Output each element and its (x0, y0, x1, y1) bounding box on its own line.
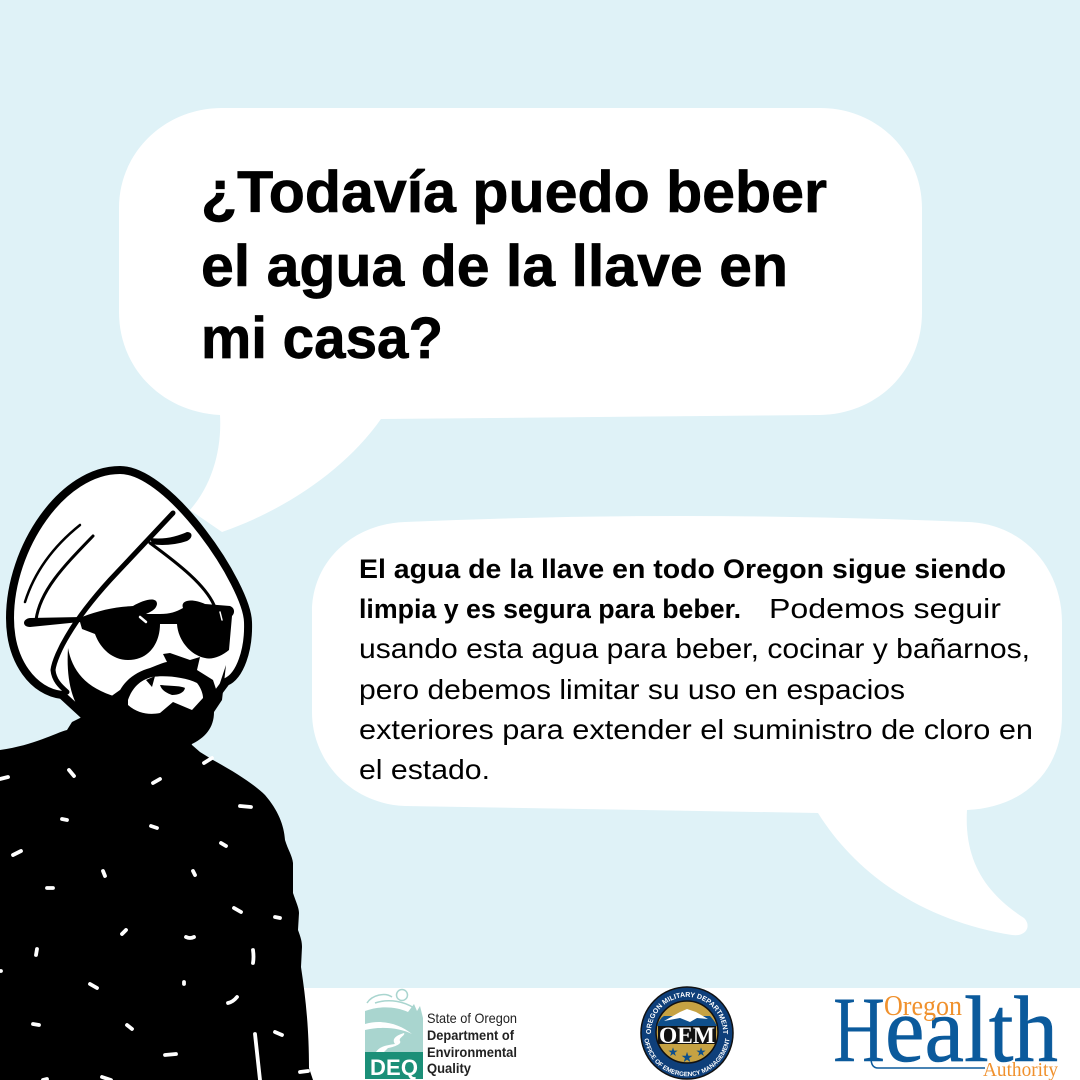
logo: OEM seal (640, 986, 734, 1080)
beard (68, 648, 226, 745)
answer text: limpia y es segura para beber. (359, 594, 741, 624)
answer text: usando esta agua para beber, cocinar y bañarnos, (359, 633, 1030, 664)
sunglasses (24, 600, 234, 660)
lens highlights (140, 612, 222, 622)
seal foreground (657, 1016, 717, 1026)
answer text: Podemos seguir (769, 593, 1001, 624)
Health wordmark: ealth (885, 978, 1058, 1080)
title: el agua de la llave en (201, 234, 788, 299)
logo: OEM seal: OREGON MILITARY DEPARTMENT (646, 992, 728, 1034)
answer text: pero debemos limitar su uso en espacios (359, 674, 905, 705)
seal stars: ★ (696, 1045, 706, 1059)
DEQ landscape (365, 990, 423, 1052)
DEQ name: Department of (427, 1027, 514, 1043)
seal mountain (664, 1009, 708, 1022)
mustache detail (146, 676, 155, 687)
logo: Oregon DEQ (365, 990, 517, 1080)
turban folds (25, 513, 214, 692)
logo: Oregon Health Authority (833, 978, 1058, 1080)
beard white around mouth (128, 676, 203, 714)
seal stars (668, 1045, 706, 1065)
seal stars: ★ (668, 1045, 678, 1059)
Health wordmark: H (833, 978, 885, 1080)
answer text (359, 554, 1033, 785)
seal wordmark: OEM (659, 1023, 715, 1048)
man illustration (0, 470, 313, 1080)
mouth (160, 685, 185, 695)
DEQ name: Quality (427, 1060, 471, 1076)
turban (10, 470, 248, 730)
DEQ name: State of Oregon (427, 1010, 517, 1026)
logo: OEM seal: OFFICE OF EMERGENCY MANAGEMENT (644, 1038, 730, 1076)
seal stars: ★ (681, 1049, 693, 1065)
answer text: exteriores para extender el suministro de cloro en (359, 714, 1033, 745)
DEQ name: Environmental (427, 1044, 517, 1060)
answer text: el estado. (359, 754, 490, 785)
question speech bubble (119, 108, 922, 532)
underline (871, 1058, 985, 1068)
DEQ name (427, 1010, 517, 1076)
turban knot end (150, 532, 192, 545)
DEQ badge (365, 1052, 423, 1079)
logo: Oregon DEQ: DEQ (370, 1055, 418, 1080)
answer text: El agua de la llave en todo Oregon sigue siendo (359, 554, 1006, 584)
title: mi casa? (201, 306, 443, 371)
body and sweater (0, 690, 313, 1080)
seal wordmark backing (658, 1026, 716, 1044)
title (201, 160, 827, 371)
title: ¿Todavía puedo beber (201, 160, 827, 225)
answer speech bubble (312, 516, 1062, 935)
Oregon wordmark: Oregon (884, 990, 962, 1022)
sweater flecks (0, 758, 308, 1080)
